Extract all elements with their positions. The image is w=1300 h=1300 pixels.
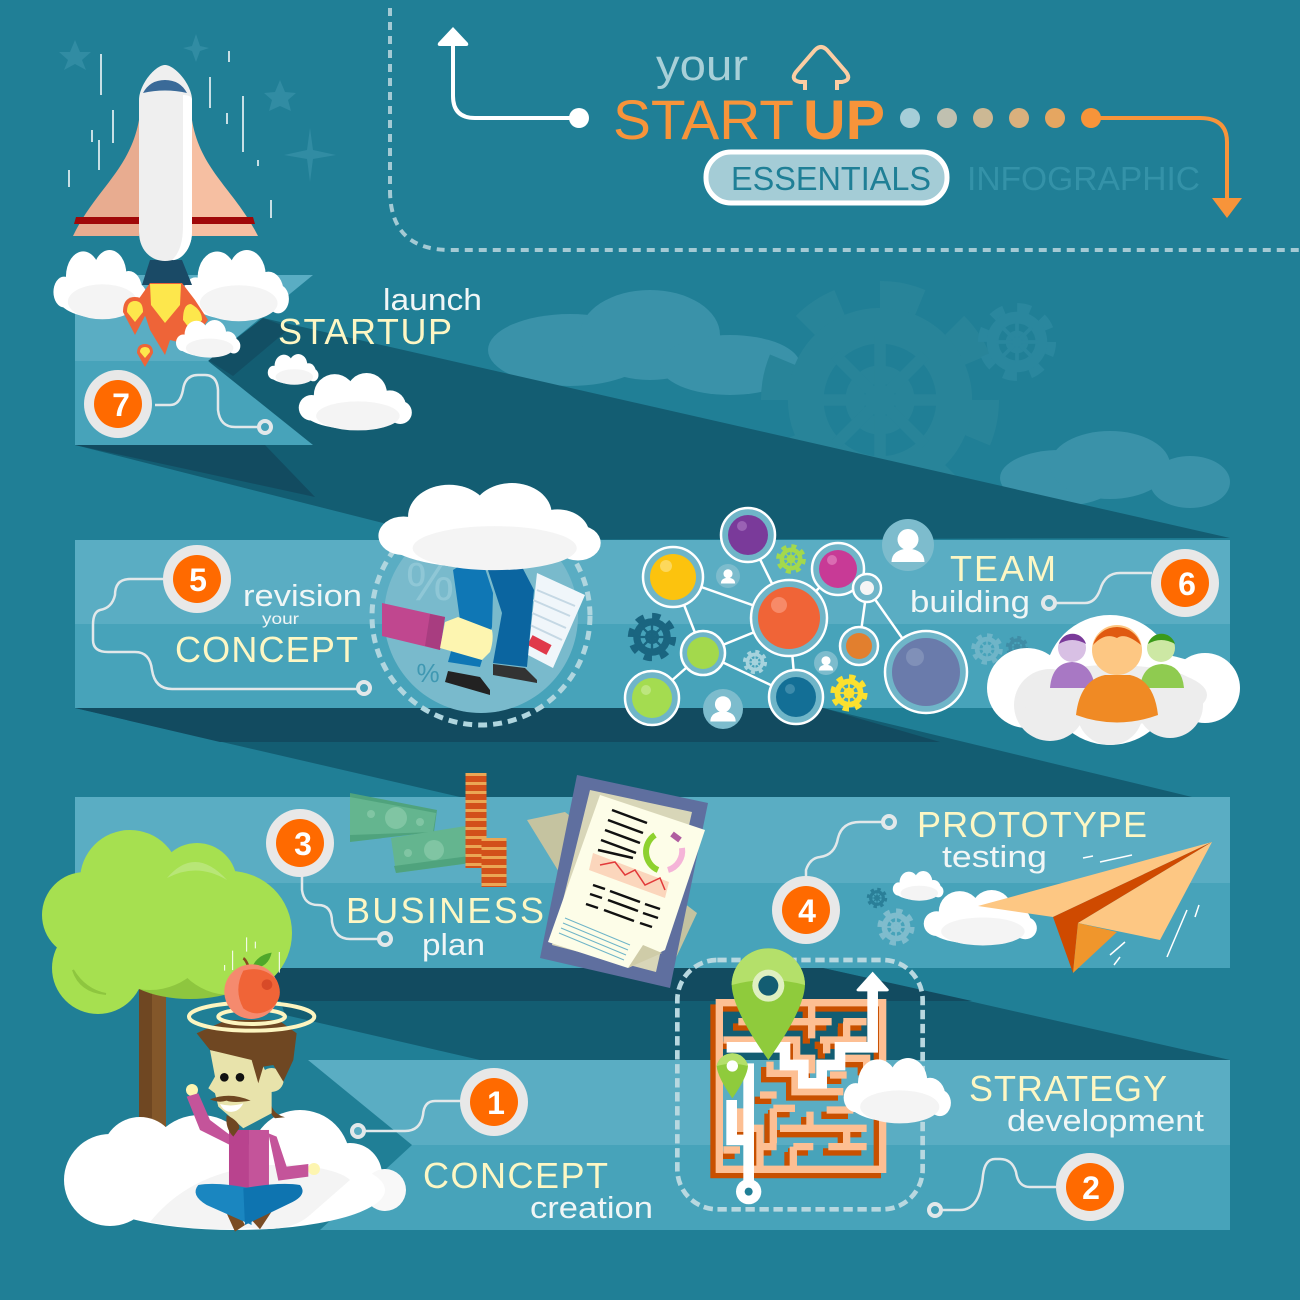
essentials pill: ESSENTIALS bbox=[731, 160, 931, 197]
launch startup label: STARTUP bbox=[278, 311, 452, 352]
rocket speed lines bbox=[69, 51, 271, 218]
step 7 badge bbox=[84, 370, 271, 438]
torso bbox=[229, 1130, 269, 1188]
clouds around rocket bbox=[53, 250, 289, 321]
step 4 badge bbox=[772, 816, 895, 944]
gears near prototype bbox=[868, 889, 912, 943]
route start ring bbox=[736, 1179, 761, 1204]
legs crossed bbox=[196, 1184, 303, 1232]
panel: band concept and strategy bbox=[308, 1060, 1230, 1230]
purple node bbox=[721, 508, 775, 562]
panel: band business and prototype bbox=[75, 797, 1230, 968]
title: your bbox=[656, 41, 748, 90]
icon: legs walking with hand and paper: % bbox=[416, 658, 440, 688]
step 1 badge bbox=[352, 1068, 528, 1137]
title bbox=[438, 27, 1242, 218]
team building label: building bbox=[910, 584, 1030, 619]
icon: tree bbox=[42, 830, 292, 1130]
dashed header frame bbox=[390, 8, 1300, 250]
arrow head bbox=[857, 972, 889, 991]
dashed frame bbox=[677, 960, 923, 1209]
stars bbox=[59, 34, 336, 182]
user icons bbox=[703, 519, 934, 729]
business plan label bbox=[346, 890, 544, 962]
step 3 badge: 3 bbox=[294, 826, 312, 862]
maze peach walls bbox=[719, 1003, 883, 1169]
maze group bbox=[677, 948, 923, 1209]
step 7 badge: 7 bbox=[112, 387, 130, 423]
team building label bbox=[910, 548, 1056, 619]
strategy development label: development bbox=[1007, 1103, 1204, 1138]
middle fold shadow bbox=[75, 708, 1192, 797]
big pin bbox=[732, 948, 805, 1060]
small orange node bbox=[840, 627, 878, 665]
magenta node bbox=[812, 543, 864, 595]
business plan label: BUSINESS bbox=[346, 890, 544, 931]
revision your concept label: CONCEPT bbox=[175, 629, 358, 670]
step 5 badge: 5 bbox=[189, 562, 207, 598]
concept creation panel bbox=[352, 1068, 653, 1225]
arrow: white start bbox=[438, 27, 589, 128]
gears bbox=[631, 546, 1027, 709]
cloud under man bbox=[64, 1110, 406, 1230]
apple with rings bbox=[189, 937, 314, 1031]
icon: clipboard with report bbox=[527, 775, 708, 988]
top fold shadow bbox=[75, 318, 1230, 540]
step 2 badge: 2 bbox=[1082, 1170, 1100, 1206]
launch startup label bbox=[278, 282, 482, 352]
concept creation label: creation bbox=[530, 1190, 653, 1225]
step 5 badge bbox=[93, 545, 370, 694]
periwinkle node bbox=[885, 631, 967, 713]
arm with raised hand bbox=[186, 1084, 230, 1145]
panel: band revision and team bbox=[75, 540, 1230, 708]
strategy development label bbox=[969, 1068, 1204, 1138]
strategy panel bbox=[677, 948, 1204, 1221]
cloud above legs bbox=[378, 483, 601, 570]
lower fold shadow bbox=[270, 968, 1230, 1060]
icon: paper plane bbox=[978, 842, 1212, 973]
background clouds and gears bbox=[488, 290, 1230, 508]
prototype testing panel bbox=[772, 804, 1212, 973]
hair bbox=[197, 1020, 297, 1083]
hair back bbox=[268, 1097, 285, 1118]
cloud on maze bbox=[844, 1058, 951, 1123]
prototype testing label: testing bbox=[942, 839, 1047, 874]
revision your concept label: your bbox=[262, 611, 300, 628]
face bbox=[208, 1050, 284, 1137]
white route bbox=[727, 987, 873, 1192]
essentials pill bbox=[706, 152, 947, 203]
green node bbox=[625, 671, 679, 725]
step 3 badge bbox=[266, 809, 391, 945]
step 4 badge: 4 bbox=[798, 893, 816, 929]
team building label: TEAM bbox=[950, 548, 1056, 589]
concept creation label: CONCEPT bbox=[423, 1155, 608, 1196]
strategy development label: STRATEGY bbox=[969, 1068, 1167, 1109]
progress dots and orange arrow bbox=[900, 108, 1242, 218]
small pin bbox=[717, 1053, 748, 1098]
icon: legs walking with hand and paper bbox=[372, 507, 590, 725]
step 6 badge: 6 bbox=[1178, 566, 1196, 602]
revision concept panel bbox=[93, 483, 601, 725]
step 1 badge: 1 bbox=[487, 1085, 505, 1121]
big orange node bbox=[751, 580, 827, 656]
revision your concept label bbox=[175, 578, 362, 670]
clouds below rocket bbox=[176, 320, 412, 430]
icon: up arrow house bbox=[794, 47, 848, 90]
blue node bbox=[769, 670, 823, 724]
small white node bbox=[853, 574, 881, 602]
revision your concept label: revision bbox=[243, 578, 362, 613]
prototype testing label bbox=[917, 804, 1147, 874]
business plan panel bbox=[266, 773, 708, 988]
launch startup label: launch bbox=[383, 282, 482, 317]
icon: man with apple bbox=[186, 937, 320, 1232]
icon: legs walking with hand and paper: % bbox=[406, 552, 454, 612]
icon: rocket bbox=[73, 65, 258, 367]
clouds near plane bbox=[893, 871, 1037, 945]
prototype testing label: PROTOTYPE bbox=[917, 804, 1147, 845]
panel: launch arrow band bbox=[75, 275, 313, 445]
concept creation label bbox=[423, 1155, 653, 1225]
title: UP bbox=[803, 88, 885, 151]
title: START bbox=[613, 88, 794, 151]
icon: money and coins bbox=[350, 773, 494, 887]
arm with open hand bbox=[268, 1133, 320, 1181]
icon: team on cloud bbox=[987, 615, 1240, 745]
small green node bbox=[681, 631, 725, 675]
step 6 badge bbox=[1043, 549, 1219, 617]
title: INFOGRAPHIC bbox=[967, 160, 1200, 197]
business plan label: plan bbox=[422, 927, 485, 962]
maze dark side bbox=[714, 1008, 877, 1175]
step 2 badge bbox=[929, 1153, 1124, 1221]
team network diagram bbox=[625, 508, 1027, 729]
yellow node bbox=[643, 547, 703, 607]
